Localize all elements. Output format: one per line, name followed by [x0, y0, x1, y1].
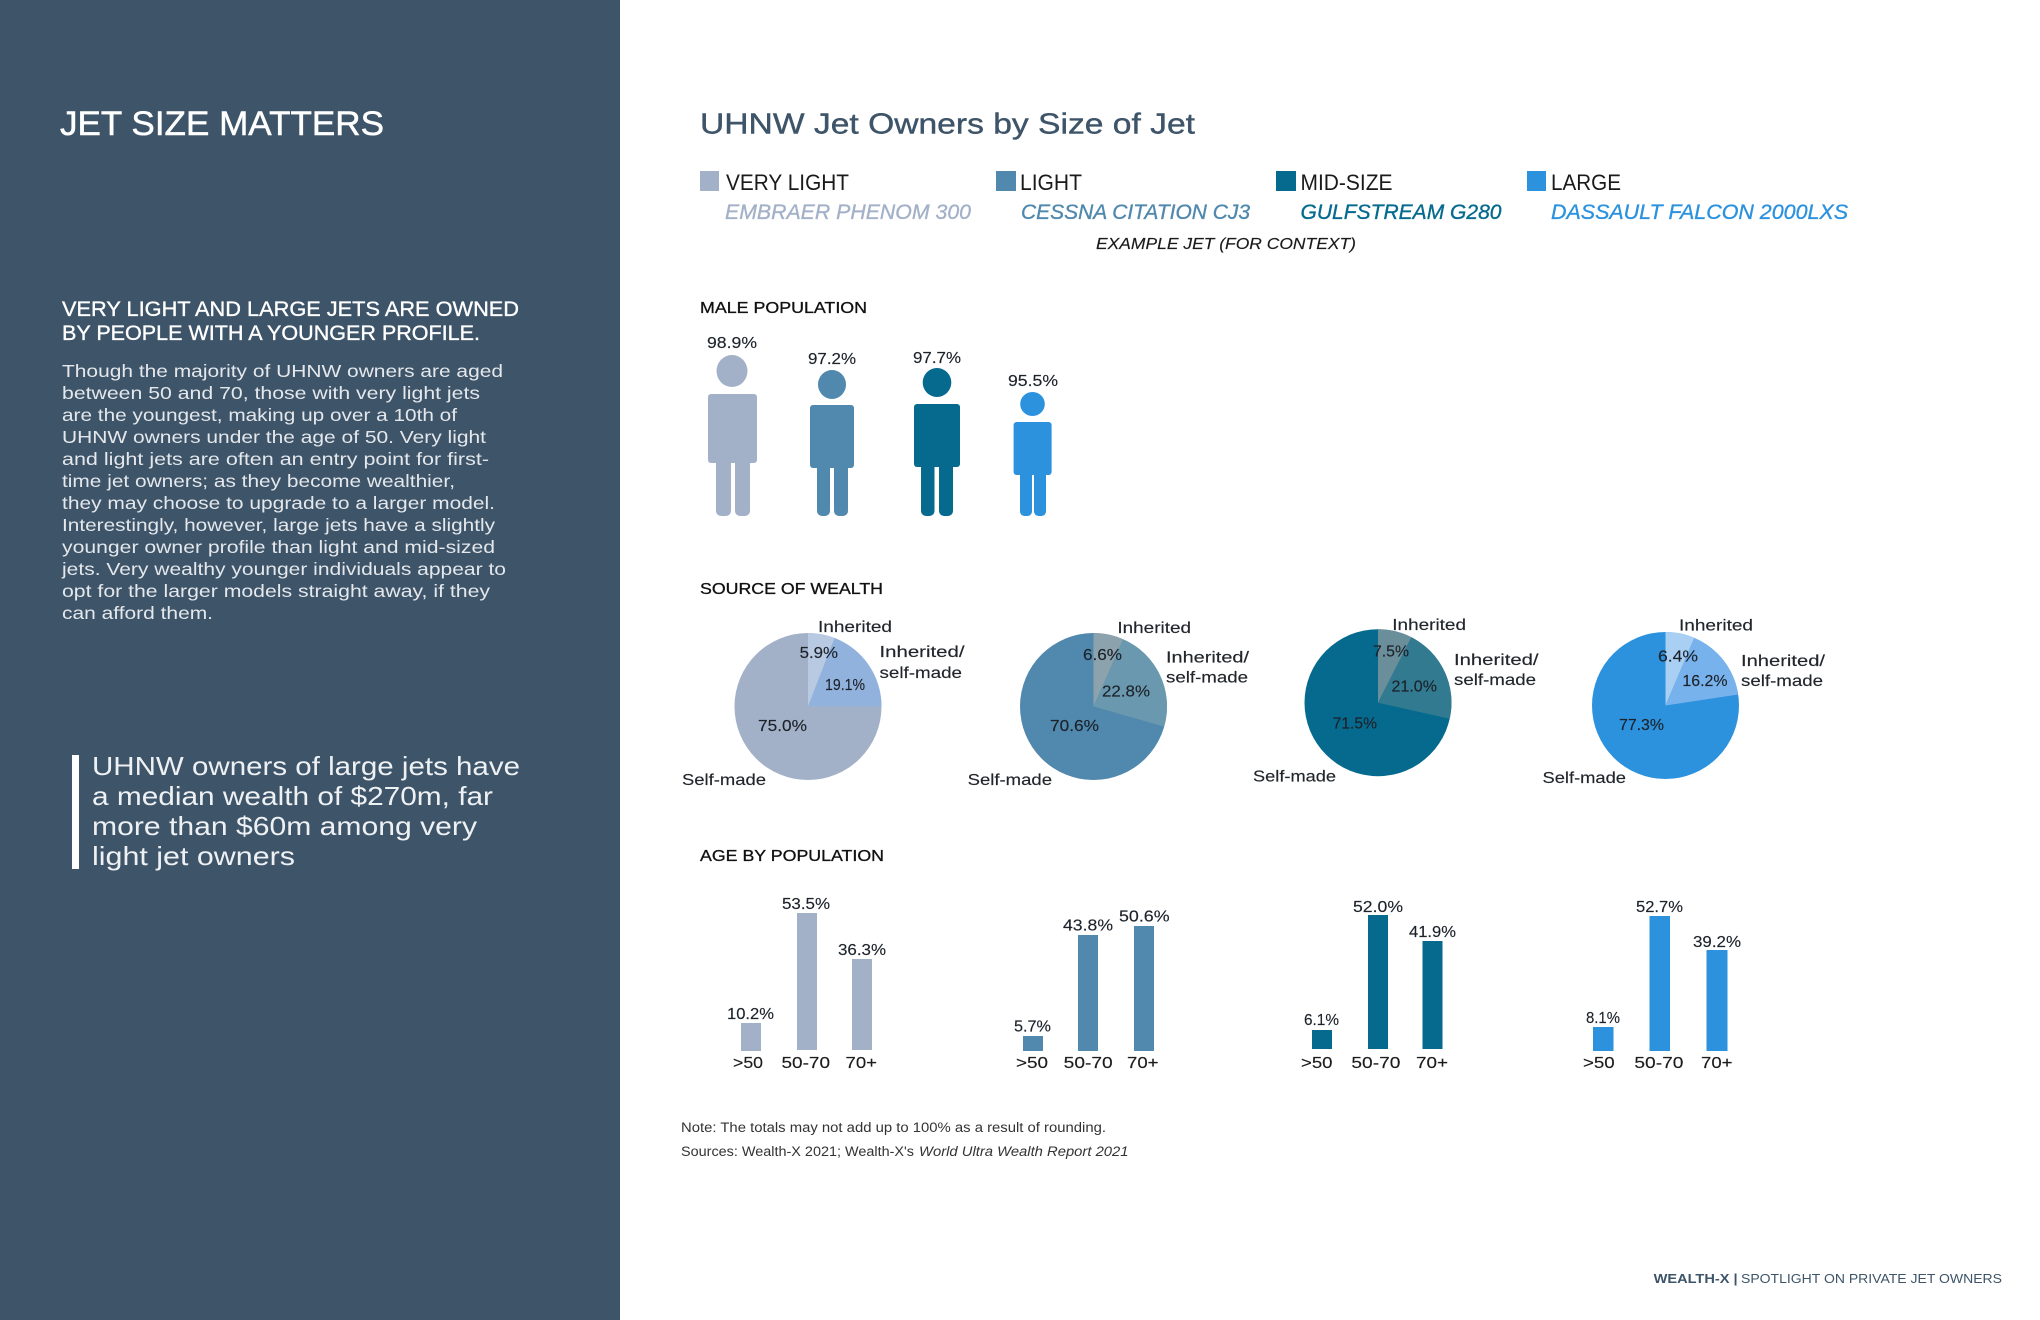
- legend: jet sizes and example jets: [700, 170, 1849, 253]
- pie chart: mid-size source of wealth: Inherited: [1392, 617, 1466, 634]
- pie chart: very light source of wealth: Inherited: [818, 619, 892, 636]
- bar chart: very light age: 36.3%: [838, 942, 886, 959]
- note and sources: Sources: Wealth-X 2021; Wealth-X's: [681, 1144, 914, 1159]
- person: large 95.5%: 95.5%: [1008, 373, 1058, 390]
- text block: body paragraph: and light jets are often an entry point for first-: [62, 449, 489, 469]
- bar chart: large age: 8.1%: [1586, 1010, 1620, 1027]
- legend item: light: [996, 170, 1250, 224]
- pictogram chart: male population: [707, 335, 1058, 516]
- bar chart: mid-size age: 52.0%: [1353, 899, 1403, 916]
- person: mid-size 97.7%: 97.7%: [913, 350, 961, 367]
- legend item: very light: VERY LIGHT: [726, 170, 849, 195]
- callout: median wealth: UHNW owners of large jets have: [92, 751, 520, 781]
- legend item: very light: EMBRAER PHENOM 300: [725, 200, 971, 224]
- bar chart: very light age: 53.5%: [782, 896, 830, 913]
- pie chart: very light source of wealth: Self-made: [682, 772, 766, 789]
- pie chart: light source of wealth: Self-made: [968, 772, 1052, 789]
- text block: body paragraph: [61, 361, 506, 623]
- pie chart: light source of wealth: 70.6%: [1050, 718, 1099, 735]
- bar chart: light age: 43.8%: [1063, 918, 1113, 935]
- subheading: VERY LIGHT AND LARGE JETS ARE OWNED: [62, 298, 519, 321]
- pie chart: mid-size source of wealth: Self-made: [1253, 769, 1336, 786]
- pie chart: light source of wealth: 22.8%: [1102, 684, 1150, 701]
- legend item: light: LIGHT: [1020, 170, 1082, 195]
- legend item: very light: [700, 170, 971, 224]
- pie chart: large source of wealth: 77.3%: [1619, 717, 1664, 734]
- bar chart: light age: 50-70: [1064, 1055, 1113, 1072]
- text block: body paragraph: they may choose to upgrade to a larger model.: [62, 493, 495, 513]
- callout: median wealth: [72, 751, 520, 871]
- pie chart: light source of wealth: [968, 620, 1250, 789]
- pie chart: very light source of wealth: 19.1%: [825, 677, 865, 694]
- legend item: mid-size: [1276, 170, 1502, 224]
- pie chart: mid-size source of wealth: self-made: [1454, 672, 1536, 689]
- bar chart: mid-size age: 41.9%: [1409, 924, 1456, 941]
- bar chart: mid-size age: 6.1%: [1304, 1012, 1339, 1029]
- subheading: [62, 298, 519, 345]
- person: mid-size 97.7%: [913, 350, 961, 516]
- legend item: large: LARGE: [1551, 170, 1621, 195]
- person: very light 98.9%: [707, 335, 757, 516]
- legend caption: EXAMPLE JET (FOR CONTEXT): [1096, 236, 1356, 253]
- pie chart: large source of wealth: Self-made: [1542, 770, 1626, 787]
- text block: body paragraph: between 50 and 70, those with very light jets: [62, 383, 480, 403]
- footer: SPOTLIGHT ON PRIVATE JET OWNERS: [1741, 1272, 2002, 1286]
- pie chart: mid-size source of wealth: 7.5%: [1373, 644, 1409, 661]
- legend item: large: DASSAULT FALCON 2000LXS: [1551, 200, 1849, 224]
- pie chart: light source of wealth: Inherited/: [1166, 650, 1250, 667]
- callout: median wealth: a median wealth of $270m, far: [92, 781, 493, 811]
- bar chart: very light age: 10.2%: [727, 1006, 774, 1023]
- bar chart: mid-size age: [1301, 899, 1456, 1072]
- section heading: source of wealth: SOURCE OF WEALTH: [700, 581, 883, 598]
- person: light 97.2%: [808, 351, 856, 516]
- pie chart: mid-size source of wealth: Inherited/: [1454, 652, 1539, 669]
- note and sources: Note: The totals may not add up to 100% as a result of rounding.: [681, 1120, 1106, 1135]
- pie chart: large source of wealth: 16.2%: [1682, 673, 1728, 690]
- pie chart: large source of wealth: [1542, 618, 1826, 787]
- bar chart: large age: 70+: [1701, 1055, 1732, 1072]
- pie chart: large source of wealth: Inherited: [1679, 618, 1753, 635]
- bar chart: large age: [1583, 899, 1741, 1072]
- pie chart: very light source of wealth: 75.0%: [758, 718, 807, 735]
- legend item: light: CESSNA CITATION CJ3: [1021, 200, 1250, 224]
- pie chart: large source of wealth: 6.4%: [1658, 649, 1698, 666]
- pie chart: very light source of wealth: Inherited/: [880, 644, 965, 661]
- text block: body paragraph: younger owner profile than light and mid-sized: [62, 537, 495, 557]
- subheading: BY PEOPLE WITH A YOUNGER PROFILE.: [62, 322, 480, 345]
- bar chart: mid-size age: 50-70: [1351, 1055, 1401, 1072]
- text block: body paragraph: jets. Very wealthy younger individuals appear to: [61, 559, 506, 579]
- bar chart: light age: [1014, 909, 1170, 1072]
- bar chart: very light age: 70+: [846, 1055, 877, 1072]
- legend item: mid-size: MID-SIZE: [1300, 170, 1392, 195]
- bar chart: large age: 50-70: [1634, 1055, 1684, 1072]
- text block: body paragraph: time jet owners; as they become wealthier,: [62, 471, 455, 491]
- legend item: large: [1527, 170, 1849, 224]
- bar chart: light age: 50.6%: [1119, 909, 1170, 926]
- pie chart: large source of wealth: self-made: [1741, 673, 1823, 690]
- text block: body paragraph: can afford them.: [62, 603, 213, 623]
- text block: body paragraph: Though the majority of UHNW owners are aged: [62, 361, 503, 381]
- text block: body paragraph: are the youngest, making up over a 10th of: [62, 405, 457, 425]
- panel: left narrative sidebar: [0, 0, 620, 1320]
- bar chart: large age: 52.7%: [1636, 899, 1683, 916]
- pie chart: mid-size source of wealth: 71.5%: [1333, 716, 1377, 733]
- text block: body paragraph: UHNW owners under the age of 50. Very light: [62, 427, 486, 447]
- bar chart: very light age: 50-70: [782, 1055, 830, 1072]
- bar chart: very light age: >50: [733, 1055, 763, 1072]
- pie chart: mid-size source of wealth: 21.0%: [1392, 679, 1437, 696]
- person: large 95.5%: [1008, 373, 1058, 516]
- bar chart: light age: >50: [1016, 1055, 1048, 1072]
- pie chart: large source of wealth: Inherited/: [1741, 653, 1826, 670]
- footer: WEALTH-X |: [1654, 1272, 1738, 1286]
- bar chart: large age: 39.2%: [1693, 934, 1741, 951]
- pie chart: light source of wealth: self-made: [1166, 670, 1248, 687]
- pie chart: very light source of wealth: 5.9%: [800, 645, 838, 662]
- text block: body paragraph: opt for the larger models straight away, if they: [62, 581, 490, 601]
- section heading: male population: MALE POPULATION: [700, 300, 867, 317]
- bar chart: light age: 70+: [1127, 1055, 1158, 1072]
- bar chart: large age: >50: [1583, 1055, 1615, 1072]
- footer: [1654, 1272, 2002, 1286]
- heading: UHNW jet owners by size of jet: UHNW Jet Owners by Size of Jet: [700, 108, 1195, 140]
- bar chart: light age: 5.7%: [1014, 1019, 1051, 1036]
- pie chart: very light source of wealth: [682, 619, 965, 789]
- callout: median wealth: more than $60m among very: [92, 811, 477, 841]
- pie chart: light source of wealth: Inherited: [1117, 620, 1191, 637]
- legend item: mid-size: GULFSTREAM G280: [1300, 200, 1502, 224]
- pie chart: very light source of wealth: self-made: [880, 665, 962, 682]
- note and sources: World Ultra Wealth Report 2021: [919, 1144, 1128, 1159]
- person: very light 98.9%: 98.9%: [707, 335, 757, 352]
- bar chart: mid-size age: >50: [1301, 1055, 1333, 1072]
- callout: median wealth: light jet owners: [92, 841, 295, 871]
- bar chart: mid-size age: 70+: [1416, 1055, 1448, 1072]
- pie chart: mid-size source of wealth: [1253, 617, 1539, 786]
- title: jet size matters: JET SIZE MATTERS: [60, 105, 384, 143]
- text block: body paragraph: Interestingly, however, large jets have a slightly: [62, 515, 495, 535]
- note and sources: [681, 1120, 1128, 1159]
- pie chart: light source of wealth: 6.6%: [1083, 647, 1122, 664]
- bar chart: very light age: [727, 896, 886, 1072]
- section heading: age by population: AGE BY POPULATION: [700, 848, 884, 865]
- person: light 97.2%: 97.2%: [808, 351, 856, 368]
